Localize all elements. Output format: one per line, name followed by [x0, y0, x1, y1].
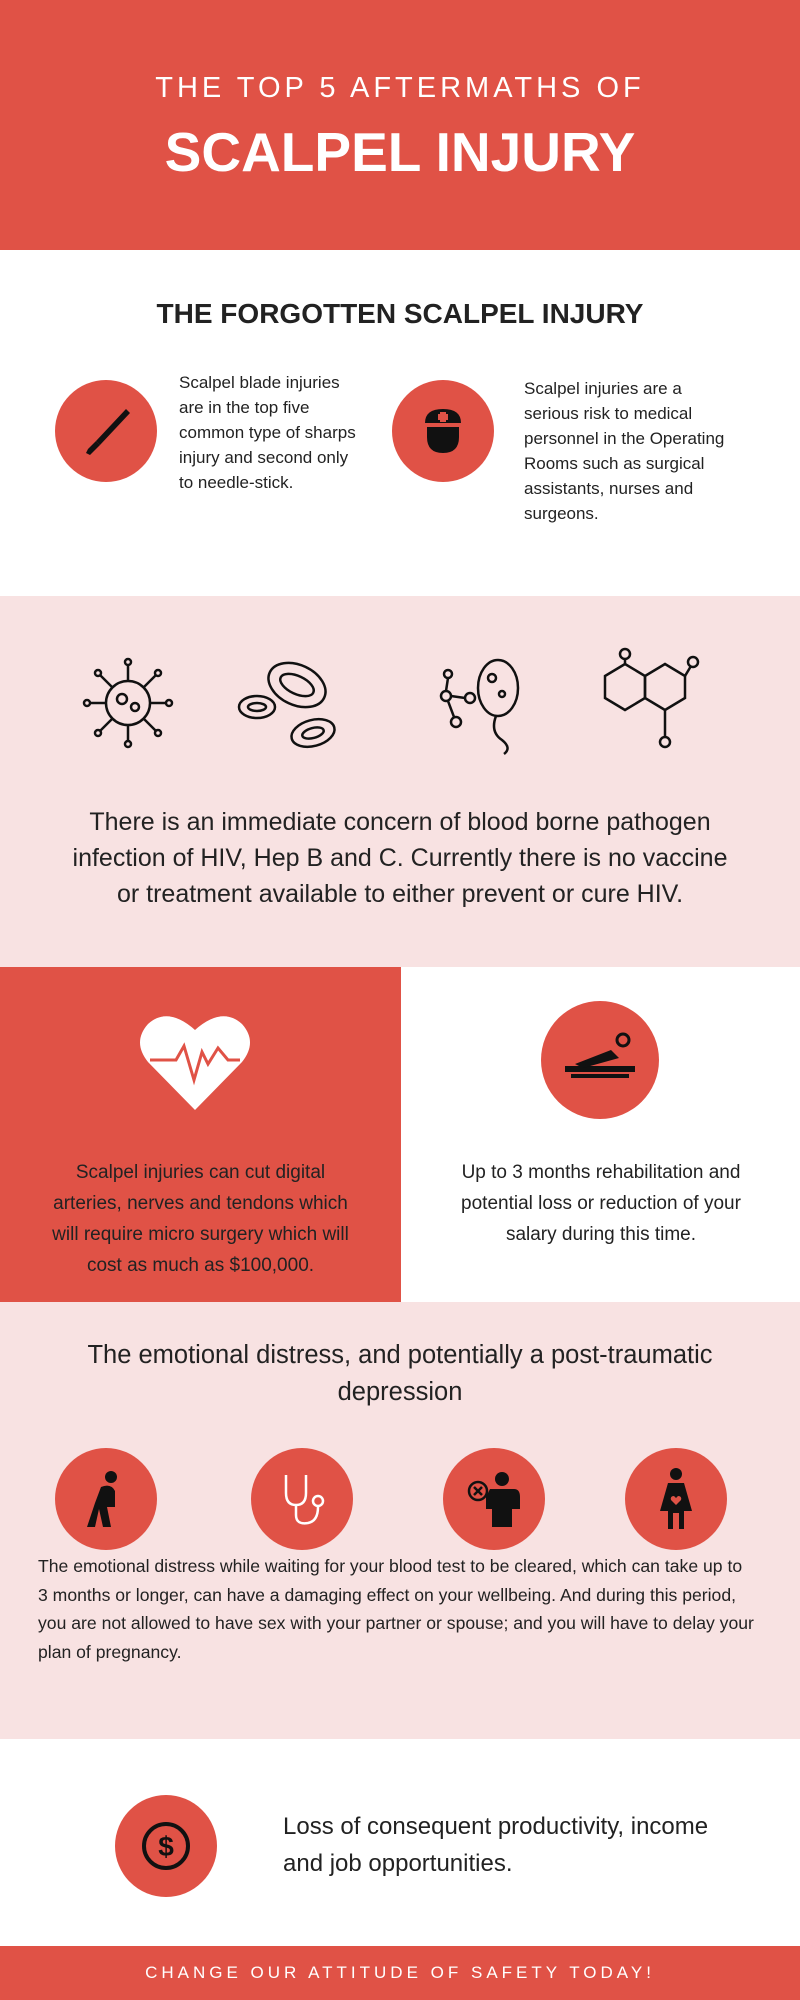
text: scalpel blade injuries: Scalpel blade injuries	[179, 373, 340, 392]
icon: molecule	[604, 648, 700, 748]
text: scalpel blade injuries: to needle-stick.	[179, 473, 293, 492]
icon: heart	[140, 1016, 250, 1110]
text: emotional paragraph: plan of pregnancy.	[38, 1642, 181, 1662]
text: emotional paragraph: The emotional distress while waiting for your blood test to be cleared, which can take up to	[38, 1556, 742, 1576]
title line 2: SCALPEL INJURY	[165, 121, 635, 183]
text: cut arteries: Scalpel injuries can cut digital arteries, nerves and tendons which will require micro surgery which will cost as much as $100,000.	[52, 1162, 349, 1276]
icon: virus	[82, 658, 174, 748]
title line 1: THE TOP 5 AFTERMATHS OF	[155, 72, 645, 104]
text: scalpel blade injuries	[179, 373, 356, 492]
icon: bacteria	[440, 658, 520, 755]
text: pathogen concern	[73, 808, 727, 908]
text: scalpel blade injuries: common type of sharps	[179, 423, 356, 442]
panel: pathogens	[0, 596, 800, 967]
icon: no sex	[443, 1448, 545, 1550]
text: emotional paragraph: 3 months or longer, can have a damaging effect on your wellbeing. And during this period,	[38, 1584, 736, 1604]
icon: pregnant woman	[625, 1448, 727, 1550]
text: scalpel blade injuries: are in the top five	[179, 398, 309, 417]
icon: sad walking man	[55, 1448, 157, 1550]
text: scalpel blade injuries: injury and second only	[179, 448, 348, 467]
footer	[0, 1946, 800, 2000]
text: productivity loss: Loss of consequent productivity, income and job opportunities.	[283, 1813, 708, 1877]
section heading: forgotten injury: THE FORGOTTEN SCALPEL INJURY	[157, 298, 643, 329]
icon: dollar: $	[158, 1831, 174, 1862]
icon: patient on bed	[541, 1001, 659, 1119]
panel: micro surgery	[0, 967, 401, 1302]
icon: dollar	[115, 1795, 217, 1897]
footer: CHANGE OUR ATTITUDE OF SAFETY TODAY!	[145, 1963, 655, 1982]
icon: blood cells	[238, 662, 336, 748]
panel: emotional distress	[0, 1302, 800, 1739]
text: pathogen concern: There is an immediate concern of blood borne pathogen	[89, 808, 711, 836]
header panel	[0, 0, 800, 250]
icon: nurse	[392, 380, 494, 482]
icon: scalpel	[55, 380, 157, 482]
text: serious risk: Scalpel injuries are a	[524, 379, 682, 398]
heading: emotional distress: The emotional distress, and potentially a post-traumatic depression	[87, 1341, 713, 1406]
text: emotional paragraph	[38, 1556, 754, 1662]
text: rehabilitation: Up to 3 months rehabilitation and potential loss or reduction of your salary during this time.	[461, 1162, 741, 1245]
text: serious risk: serious risk to medical personnel in the Operating Rooms such as surgical assistants, nurses and surgeons.	[524, 404, 724, 523]
text: emotional paragraph: you are not allowed to have sex with your partner or spouse; and you will have to delay your	[38, 1613, 754, 1633]
icon: stethoscope	[251, 1448, 353, 1550]
text: pathogen concern: or treatment available to either prevent or cure HIV.	[117, 880, 683, 908]
text: pathogen concern: infection of HIV, Hep B and C. Currently there is no vaccine	[73, 844, 727, 872]
